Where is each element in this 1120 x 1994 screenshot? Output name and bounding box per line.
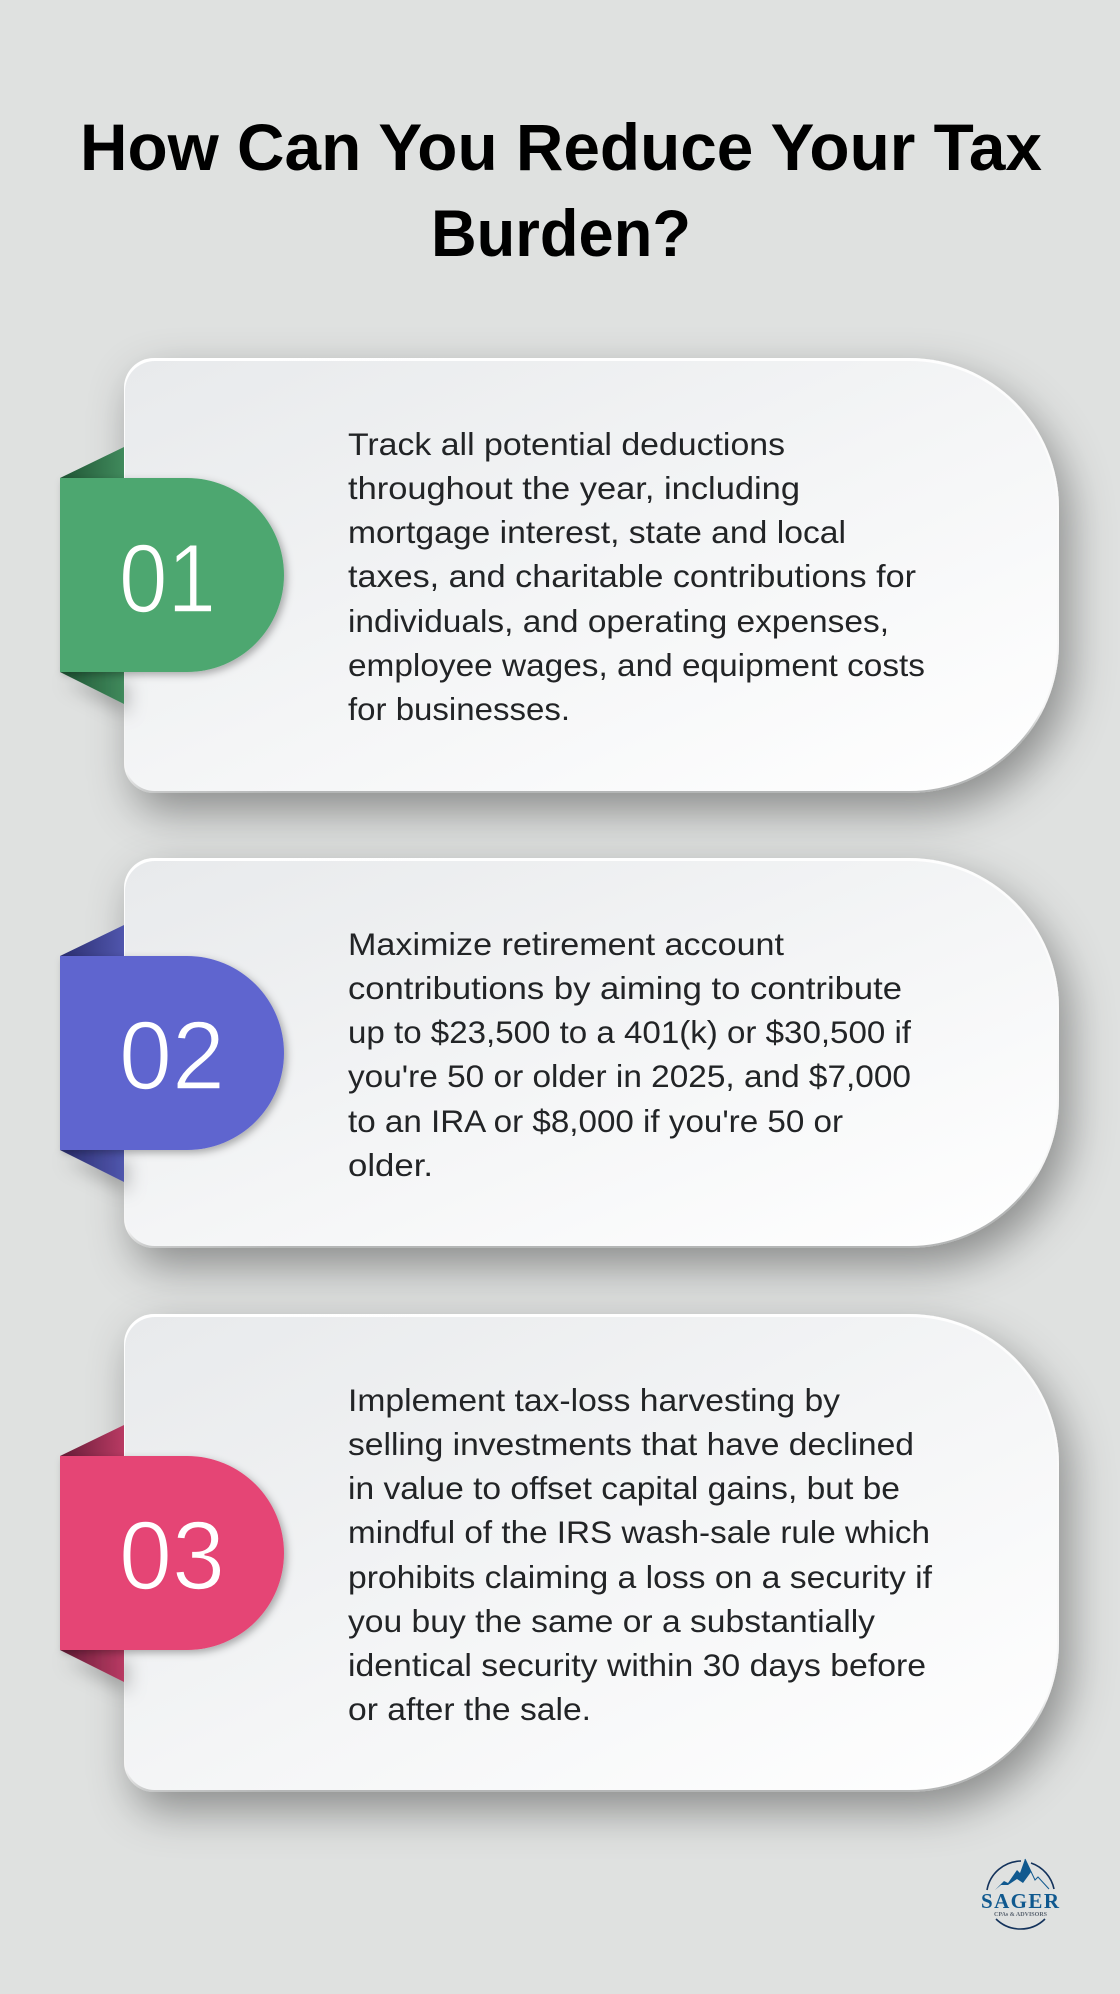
text block 1: individuals, and operating expenses, — [348, 603, 889, 639]
card 3 background — [124, 1314, 1059, 1792]
ribbon top fold 1 — [60, 447, 124, 478]
text block 1: Track all potential deductions — [348, 426, 785, 462]
card 1 background — [124, 358, 1059, 793]
text block 3: in value to offset capital gains, but be — [348, 1470, 900, 1506]
logo: Sager CPAs and Advisors: SAGER — [981, 1889, 1060, 1913]
ribbon bottom fold 3 — [60, 1650, 124, 1682]
panel: step 1 — [60, 358, 1059, 793]
text block 3: prohibits claiming a loss on a security if — [348, 1559, 932, 1595]
number tag 3 — [60, 1456, 284, 1650]
text block 2: you're 50 or older in 2025, and $7,000 — [348, 1058, 911, 1094]
number tag 2 — [60, 956, 284, 1150]
text block 3: Implement tax-loss harvesting by — [348, 1382, 840, 1418]
ribbon top fold 3 — [60, 1425, 124, 1456]
number 03: 03 — [119, 1501, 225, 1610]
text block 1: throughout the year, including — [348, 470, 800, 506]
text block 3: or after the sale. — [348, 1691, 591, 1727]
text block 2: contributions by aiming to contribute — [348, 970, 902, 1006]
ribbon top fold 2 — [60, 925, 124, 956]
text block 2: up to $23,500 to a 401(k) or $30,500 if — [348, 1014, 911, 1050]
text block 1 — [348, 426, 925, 727]
number 02: 02 — [119, 1001, 225, 1110]
text block 1: mortgage interest, state and local — [348, 514, 846, 550]
logo: Sager CPAs and Advisors — [981, 1859, 1060, 1929]
text block 2: to an IRA or $8,000 if you're 50 or — [348, 1103, 843, 1139]
title — [80, 110, 1042, 270]
number 01: 01 — [119, 524, 216, 633]
text block 3 — [348, 1382, 932, 1727]
text block 1: employee wages, and equipment costs — [348, 647, 925, 683]
ribbon bottom fold 1 — [60, 672, 124, 704]
text block 2: older. — [348, 1147, 433, 1183]
text block 3: you buy the same or a substantially — [348, 1603, 875, 1639]
text block 3: selling investments that have declined — [348, 1426, 914, 1462]
number tag 1 — [60, 478, 284, 672]
text block 1: for businesses. — [348, 691, 570, 727]
text block 2: Maximize retirement account — [348, 926, 784, 962]
panel: step 3 — [60, 1314, 1059, 1792]
logo: Sager CPAs and Advisors: CPAs & ADVISORS — [994, 1912, 1048, 1918]
text block 1: taxes, and charitable contributions for — [348, 558, 916, 594]
text block 3: identical security within 30 days before — [348, 1647, 926, 1683]
card 2 background — [124, 858, 1059, 1248]
text block 3: mindful of the IRS wash-sale rule which — [348, 1514, 930, 1550]
text block 2 — [348, 926, 911, 1183]
panel: step 2 — [60, 858, 1059, 1248]
ribbon bottom fold 2 — [60, 1150, 124, 1182]
title: How Can You Reduce Your Tax — [80, 110, 1042, 184]
title: Burden? — [431, 196, 691, 270]
